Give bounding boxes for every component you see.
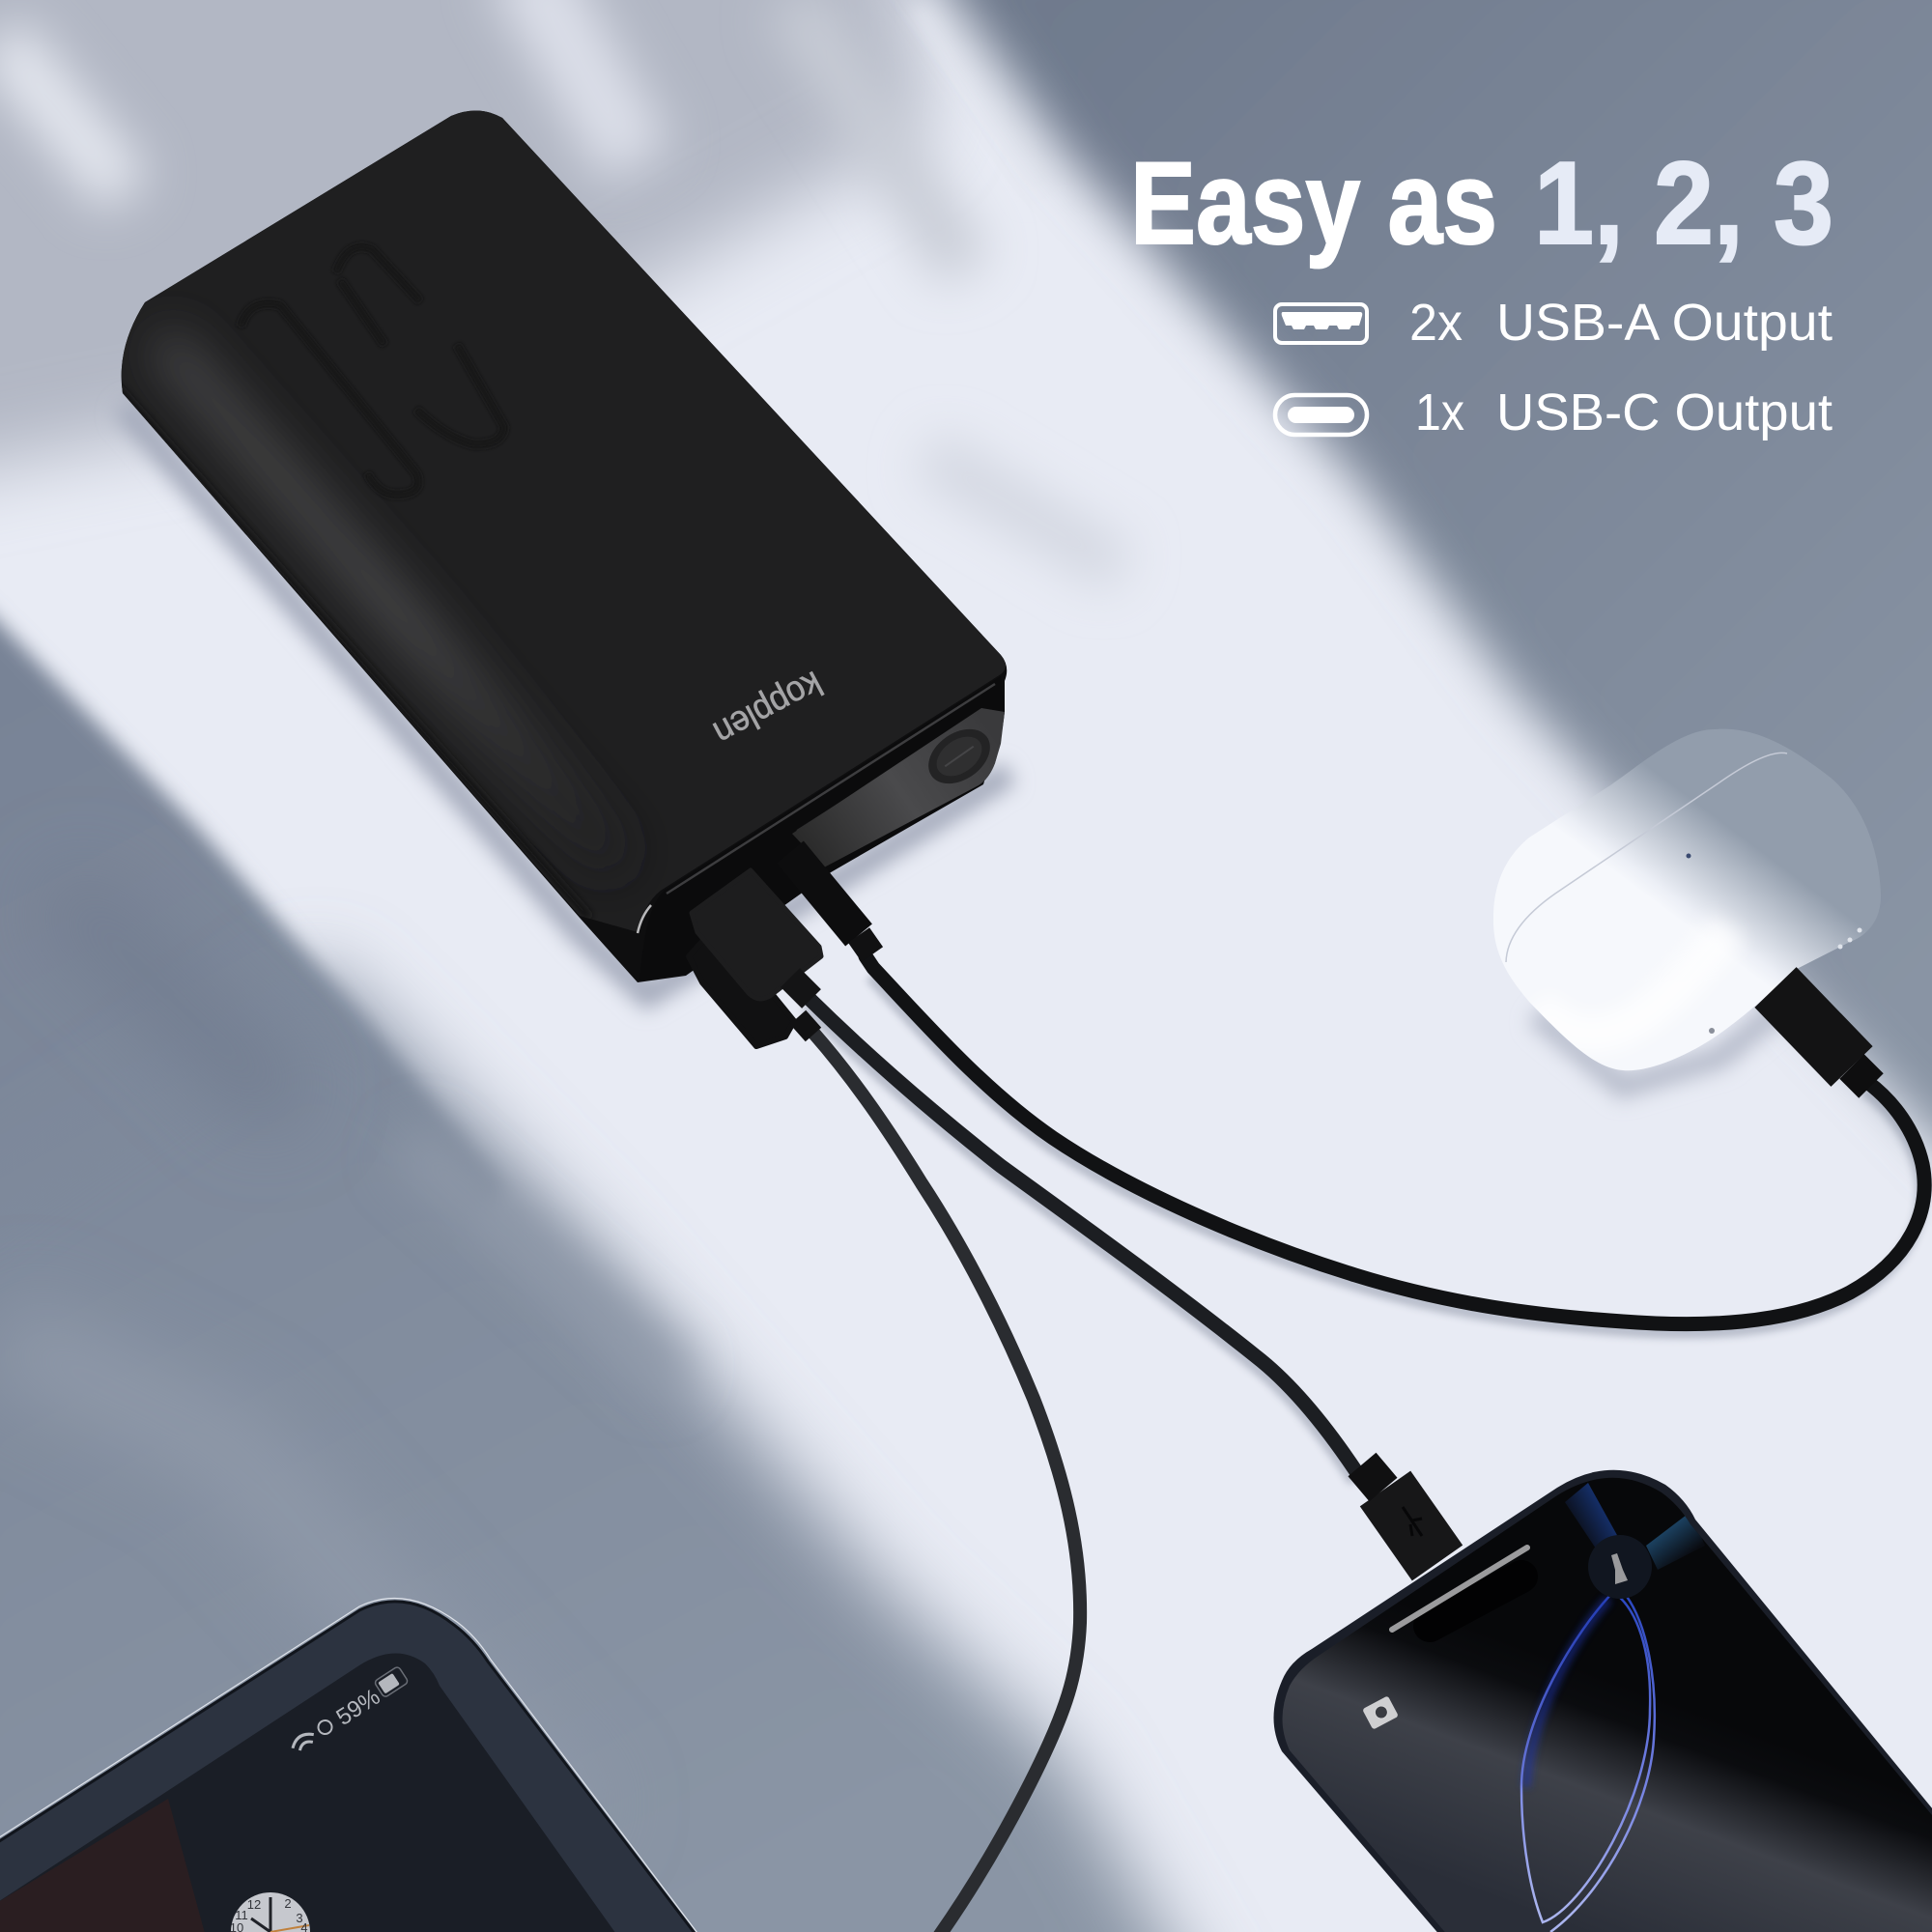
power bank bbox=[97, 87, 1024, 982]
title bbox=[1130, 137, 1833, 269]
label: 2x: 2x bbox=[1409, 294, 1463, 352]
wallpaper red sector bbox=[0, 1799, 206, 1932]
brand logo: kopplen bbox=[707, 664, 829, 753]
bank silhouette bbox=[122, 110, 1007, 982]
port: round button bbox=[919, 718, 1000, 795]
clock widget: 2 bbox=[284, 1896, 292, 1911]
cable: to left phone bbox=[813, 1033, 1080, 1932]
left phone screen bbox=[0, 1653, 618, 1932]
wifi icon bbox=[290, 1730, 317, 1753]
left phone bbox=[0, 1598, 700, 1932]
bank top face bbox=[97, 87, 1024, 956]
row: USB-A output bbox=[1275, 294, 1833, 352]
front grey panel bbox=[792, 708, 1005, 867]
USB-A plugs and USB-C plug at the power bank bbox=[689, 852, 872, 1046]
clock widget: 12 bbox=[247, 1897, 261, 1912]
earpiece highlight bbox=[1392, 1548, 1527, 1630]
case USB-C plug bbox=[1776, 987, 1852, 1066]
USB-C plug at phone bbox=[1362, 1464, 1437, 1563]
phone screen bbox=[1256, 1449, 1932, 1932]
camera button bbox=[1362, 1695, 1399, 1730]
rotation lock icon bbox=[316, 1718, 334, 1737]
case body bbox=[1493, 728, 1881, 1070]
embossed capacity mark bbox=[241, 247, 504, 495]
row: USB-C output bbox=[1275, 384, 1833, 441]
right phone bbox=[1256, 1449, 1932, 1932]
dynamic island bbox=[1430, 1577, 1521, 1626]
clock widget: 3 bbox=[296, 1911, 303, 1925]
icon: USB-A port bbox=[1275, 304, 1367, 343]
title: 1, 2, 3 bbox=[1534, 137, 1833, 269]
label: 1x: 1x bbox=[1415, 384, 1464, 441]
status bar bbox=[286, 1666, 412, 1760]
earbuds charging case bbox=[1478, 715, 1893, 1087]
clock widget bbox=[230, 1892, 310, 1932]
wallpaper blue leaf bbox=[1521, 1592, 1655, 1932]
battery icon bbox=[374, 1666, 409, 1698]
icon: USB-C port bbox=[1275, 395, 1367, 435]
flashlight button bbox=[1588, 1535, 1652, 1599]
label: USB-A Output: USB-A Output bbox=[1496, 294, 1833, 352]
cable: to right phone bbox=[809, 998, 1357, 1473]
label: USB-C Output: USB-C Output bbox=[1496, 384, 1833, 441]
cable shadows bbox=[806, 977, 1921, 1482]
glossy front trim bbox=[639, 676, 1005, 980]
clock widget: 11 bbox=[235, 1908, 248, 1922]
shadow under power bank bbox=[123, 406, 1009, 995]
phone frame bbox=[1273, 1470, 1932, 1932]
title: Easy as bbox=[1130, 137, 1497, 269]
battery percentage: 59% bbox=[331, 1684, 384, 1731]
left phone body bbox=[0, 1602, 697, 1932]
cable: to earbuds case bbox=[866, 956, 1924, 1324]
case shadow bbox=[1536, 995, 1797, 1087]
